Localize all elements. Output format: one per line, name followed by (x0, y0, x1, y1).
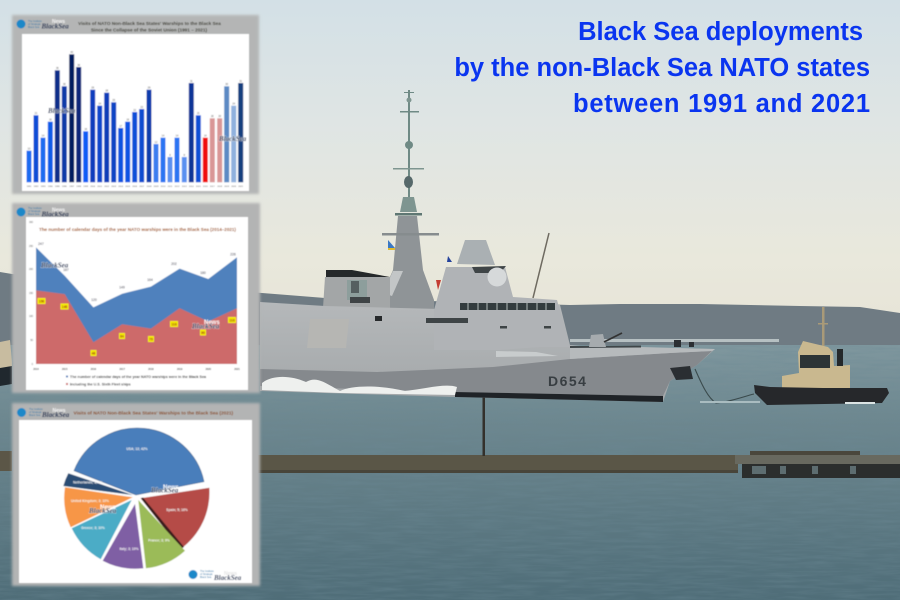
slice: France (138, 500, 185, 568)
bar value labels: 23 (140, 106, 144, 109)
total value labels: 247 (38, 242, 44, 246)
stone pier (0, 451, 738, 473)
year axis labels: 1994 (48, 186, 54, 188)
total value labels: 180 (200, 271, 206, 275)
slice: Greece (72, 500, 132, 559)
sixth fleet value labels (38, 298, 236, 356)
plot background (19, 420, 252, 583)
bar value labels: 14 (162, 134, 165, 138)
plot background (22, 34, 249, 191)
plot background (26, 217, 248, 390)
y axis labels: 0 (32, 363, 34, 366)
bar value labels: 19 (49, 118, 52, 122)
hull number: D654 (548, 373, 587, 389)
bar value labels: 36 (77, 64, 81, 67)
bar value labels: 19 (126, 118, 130, 122)
bar value labels: 17 (119, 125, 123, 128)
tug hull (754, 385, 889, 405)
year axis labels: 2021 (238, 186, 244, 188)
foam under tow (700, 401, 760, 403)
year axis labels: 1992 (34, 186, 39, 188)
slice: Spain dark edge (141, 498, 184, 549)
wooden wharf (735, 451, 900, 478)
y axis labels (29, 221, 34, 366)
anchor housing (670, 366, 693, 380)
area: all NATO warship days (36, 247, 237, 364)
year axis labels: 2011 (168, 186, 173, 188)
logo: institute, bottom right: Black Sea (200, 576, 212, 579)
pie slice labels: United Kingdom; 3; 10% (71, 499, 109, 503)
logo: institute: The Institute (28, 20, 42, 23)
crew on bow (674, 340, 694, 347)
x axis labels: 2014 (33, 368, 39, 371)
logo: institute (16, 207, 69, 218)
logo: institute, bottom right: News (224, 571, 237, 577)
logo: institute: BlackSea (41, 411, 70, 419)
sixth fleet value labels: 46 (92, 351, 95, 355)
watermark: News BlackSea: News (163, 485, 179, 491)
sixth fleet value labels: 75 (149, 337, 153, 341)
pole in front of pier (482, 390, 485, 456)
logo: institute, bottom right (188, 570, 242, 582)
tug mast (818, 307, 828, 349)
year axis labels: 2018 (217, 186, 223, 188)
year axis labels: 2009 (154, 186, 159, 188)
year axis labels: 1993 (41, 186, 46, 188)
sixth fleet value labels: 148 (62, 305, 67, 309)
panel background (12, 403, 260, 586)
logo: institute: The Institute (29, 408, 43, 411)
year axis labels: 2017 (210, 186, 216, 188)
waterline boot-topping (455, 392, 663, 402)
sea (0, 345, 900, 600)
y axis labels: 100 (29, 315, 34, 318)
forward superstructure (434, 267, 570, 350)
logo: institute: News (52, 19, 65, 25)
sixth fleet value labels: 118 (171, 322, 177, 326)
total value labels: 120 (91, 298, 97, 302)
pie slice labels (71, 447, 188, 551)
boat deck plate (496, 351, 558, 357)
logo: institute: The Institute (28, 207, 42, 210)
bar value labels: 21 (197, 112, 200, 115)
bow gun (589, 333, 622, 347)
year axis labels: 2015 (196, 186, 202, 188)
bar value labels: 21 (35, 112, 38, 115)
bar value labels: 8 (169, 154, 171, 157)
panel: warship visits bar chart 1991-2021 (12, 15, 259, 194)
bar value labels: 28 (105, 90, 109, 92)
total value labels (38, 242, 236, 302)
mast (393, 90, 424, 216)
logo: institute: BlackSea (40, 22, 69, 30)
year axis labels: 1998 (76, 186, 82, 188)
logo: institute: BlackSea (40, 210, 69, 218)
bar value labels: 25 (112, 99, 116, 102)
bar value labels: 30 (225, 83, 229, 86)
x axis labels: 2021 (234, 368, 240, 371)
year axis labels: 2006 (132, 186, 138, 188)
watermark: News BlackSea: News (52, 258, 68, 264)
bar value labels: 35 (56, 67, 59, 70)
x axis labels: 2018 (148, 368, 154, 371)
bar value labels: 16 (84, 128, 88, 131)
year axis labels: 2003 (111, 186, 117, 188)
watermark: News BlackSea: BlackSea (150, 486, 179, 494)
logo: institute: News (52, 408, 66, 414)
bar value labels: 14 (42, 134, 45, 138)
logo: institute: of Strategic (28, 210, 41, 213)
year axis labels: 2019 (224, 186, 230, 188)
chart title: Visits of NATO Non-Black Sea States' Warships to the Black Sea (78, 21, 221, 26)
tower yard arm (382, 233, 439, 236)
pie slice labels: Italy; 3; 10% (119, 547, 139, 551)
year axis labels: 2014 (189, 186, 195, 188)
year axis labels: 2007 (139, 186, 145, 188)
bar value labels: 40 (70, 51, 74, 54)
y axis labels: 50 (30, 339, 34, 342)
year axis labels: 2004 (118, 186, 124, 188)
x axis labels: 2015 (62, 368, 68, 371)
logo: institute, bottom right: BlackSea (213, 574, 242, 582)
panel: calendar days area chart 2014-2021 (12, 203, 260, 393)
total value labels: 164 (147, 278, 153, 282)
year axis labels: 1999 (83, 186, 89, 188)
ship: frigate D654 (260, 90, 715, 402)
pie slice labels: Netherlands; 1; 3% (73, 480, 103, 484)
total value labels: 149 (119, 286, 125, 290)
watermark: News BlackSea: BlackSea (191, 322, 220, 330)
watermark: BlackSea: BlackSea (47, 107, 76, 115)
logo: institute: of Strategic (29, 411, 42, 414)
slice: Netherlands (63, 473, 133, 495)
legend: Including the U.S. Sixth Fleet ships (70, 382, 131, 386)
y axis labels: 200 (29, 268, 34, 271)
logo: institute, bottom right: The Institute (200, 570, 214, 573)
title: Black Sea deployments (578, 18, 863, 46)
x axis labels: 2016 (91, 368, 97, 371)
y axis labels: 150 (29, 292, 34, 295)
bridge window dividers (468, 303, 546, 310)
bar value labels: 10 (28, 148, 31, 150)
pie chart (63, 428, 209, 569)
title (454, 18, 870, 118)
aft black roof (326, 270, 390, 277)
logo: institute, bottom right: of Strategic (200, 573, 213, 576)
chart title: The number of calendar days of the year NATO warships were in the Black Sea (2014–2021) (39, 227, 236, 232)
area: including U.S. Sixth Fleet ships (36, 290, 237, 364)
bow deck strip (570, 347, 715, 359)
logo: institute: Black Sea (29, 414, 41, 417)
distant shoreline hills (0, 272, 900, 347)
x axis labels: 2017 (119, 368, 126, 371)
chart title: Since the Collapse of the Soviet Union (1991 – 2021) (91, 28, 208, 32)
year axis labels: 1997 (69, 186, 75, 188)
chart title: Visits of NATO Non-Black Sea States' Warships to the Black Sea (2021) (74, 410, 234, 416)
bridge windows (460, 303, 555, 310)
bar value labels: 24 (98, 102, 102, 106)
legend: The number of calendar days of the year NATO warships were in the Black Sea (70, 375, 207, 379)
lower hull band (260, 351, 712, 396)
bow wave foam (262, 377, 457, 395)
bar value labels: 20 (211, 115, 214, 118)
bar value labels: 14 (176, 134, 179, 138)
sky (0, 0, 900, 345)
total value labels: 226 (230, 252, 236, 256)
flags (388, 240, 452, 290)
logo: institute (16, 19, 69, 30)
main hull (260, 302, 715, 402)
total value labels: 202 (171, 262, 177, 266)
aft superstructure (323, 277, 390, 308)
antenna (533, 233, 549, 298)
year axis labels: 2020 (231, 186, 237, 188)
year axis labels: 2005 (125, 186, 131, 188)
watermark: News BlackSea (40, 258, 69, 270)
year axis labels: 2013 (182, 186, 188, 188)
bar value labels: 24 (232, 102, 236, 106)
tower (382, 216, 434, 310)
bar value labels: 12 (155, 141, 158, 144)
watermark: BlackSea: BlackSea (218, 135, 247, 143)
year axis labels: 2010 (161, 186, 166, 188)
year axis labels: 2008 (147, 186, 152, 188)
aft mounted unit (347, 280, 370, 303)
tug wash (845, 402, 875, 404)
bar value labels: 30 (63, 83, 66, 86)
sixth fleet value labels: 84 (120, 334, 124, 338)
legend (66, 375, 207, 386)
sixth fleet value labels: 90 (201, 331, 205, 335)
panel background (12, 203, 260, 393)
year axis labels: 1991 (27, 186, 32, 188)
logo: institute: of Strategic (28, 23, 41, 26)
bar value labels (28, 51, 243, 157)
sixth fleet value labels: 156 (39, 299, 44, 303)
watermark: News BlackSea: News (204, 320, 220, 326)
bar value labels: 14 (204, 134, 207, 138)
sixth fleet value labels: 118 (229, 318, 235, 322)
year axis labels: 2001 (97, 186, 103, 188)
bar chart (26, 54, 243, 182)
y axis labels: 300 (29, 221, 34, 224)
year axis labels: 2016 (203, 186, 209, 188)
bar value labels: 29 (148, 86, 151, 90)
tow cable (695, 369, 754, 403)
logo: institute: Black Sea (28, 213, 40, 216)
bar value labels: 29 (91, 86, 95, 90)
radome (488, 268, 506, 286)
bar value labels: 22 (133, 109, 137, 112)
watermark: News BlackSea: BlackSea (88, 507, 117, 515)
title: between 1991 and 2021 (573, 90, 870, 118)
bar value labels: 20 (218, 115, 222, 118)
panel: 2021 warship visits pie chart (12, 403, 260, 586)
watermark: News BlackSea: News (100, 505, 116, 511)
tug windows (800, 355, 830, 368)
x axis labels: 2019 (177, 368, 183, 371)
title: by the non-Black Sea NATO states (454, 54, 870, 82)
radar roof (472, 266, 506, 273)
year axis labels (27, 186, 244, 188)
y axis labels: 250 (29, 245, 34, 248)
year axis labels: 1996 (62, 186, 68, 188)
tugboat (754, 307, 889, 405)
watermark: News BlackSea: BlackSea (40, 262, 69, 270)
forecastle deck edge (570, 346, 641, 348)
panel background (12, 15, 259, 194)
pie slice labels: USA; 13; 42% (126, 447, 148, 451)
slice: Spain (141, 488, 209, 549)
bar value labels: 31 (239, 80, 243, 83)
logo: institute: News (52, 208, 65, 214)
slice: USA (74, 428, 204, 495)
pie slice labels: Greece; 3; 10% (81, 526, 105, 530)
tower light panel (383, 271, 403, 296)
tug funnel (837, 349, 843, 366)
large hull panel (307, 319, 349, 348)
logo: institute (17, 408, 70, 419)
bar value labels: 31 (190, 80, 193, 83)
chart title (78, 21, 221, 32)
total value labels: 187 (63, 268, 69, 272)
pie slice labels: Spain; 5; 16% (166, 508, 188, 512)
boat at left edge (0, 340, 12, 386)
slice: Italy (103, 504, 143, 569)
x axis labels (33, 368, 240, 371)
year axis labels: 2002 (104, 186, 110, 188)
slice: United Kingdom (64, 487, 133, 527)
pie slice labels: France; 3; 9% (148, 538, 170, 542)
year axis labels: 2012 (175, 186, 180, 188)
year axis labels: 1995 (55, 186, 61, 188)
x axis labels: 2020 (206, 368, 212, 371)
pyramid radar housing (457, 240, 495, 265)
shore light strip (570, 339, 779, 342)
bar value labels: 8 (184, 154, 186, 157)
logo: institute: Black Sea (28, 26, 40, 29)
hull port details (375, 316, 551, 328)
tug wheelhouse (782, 341, 850, 388)
year axis labels: 2000 (90, 186, 96, 188)
